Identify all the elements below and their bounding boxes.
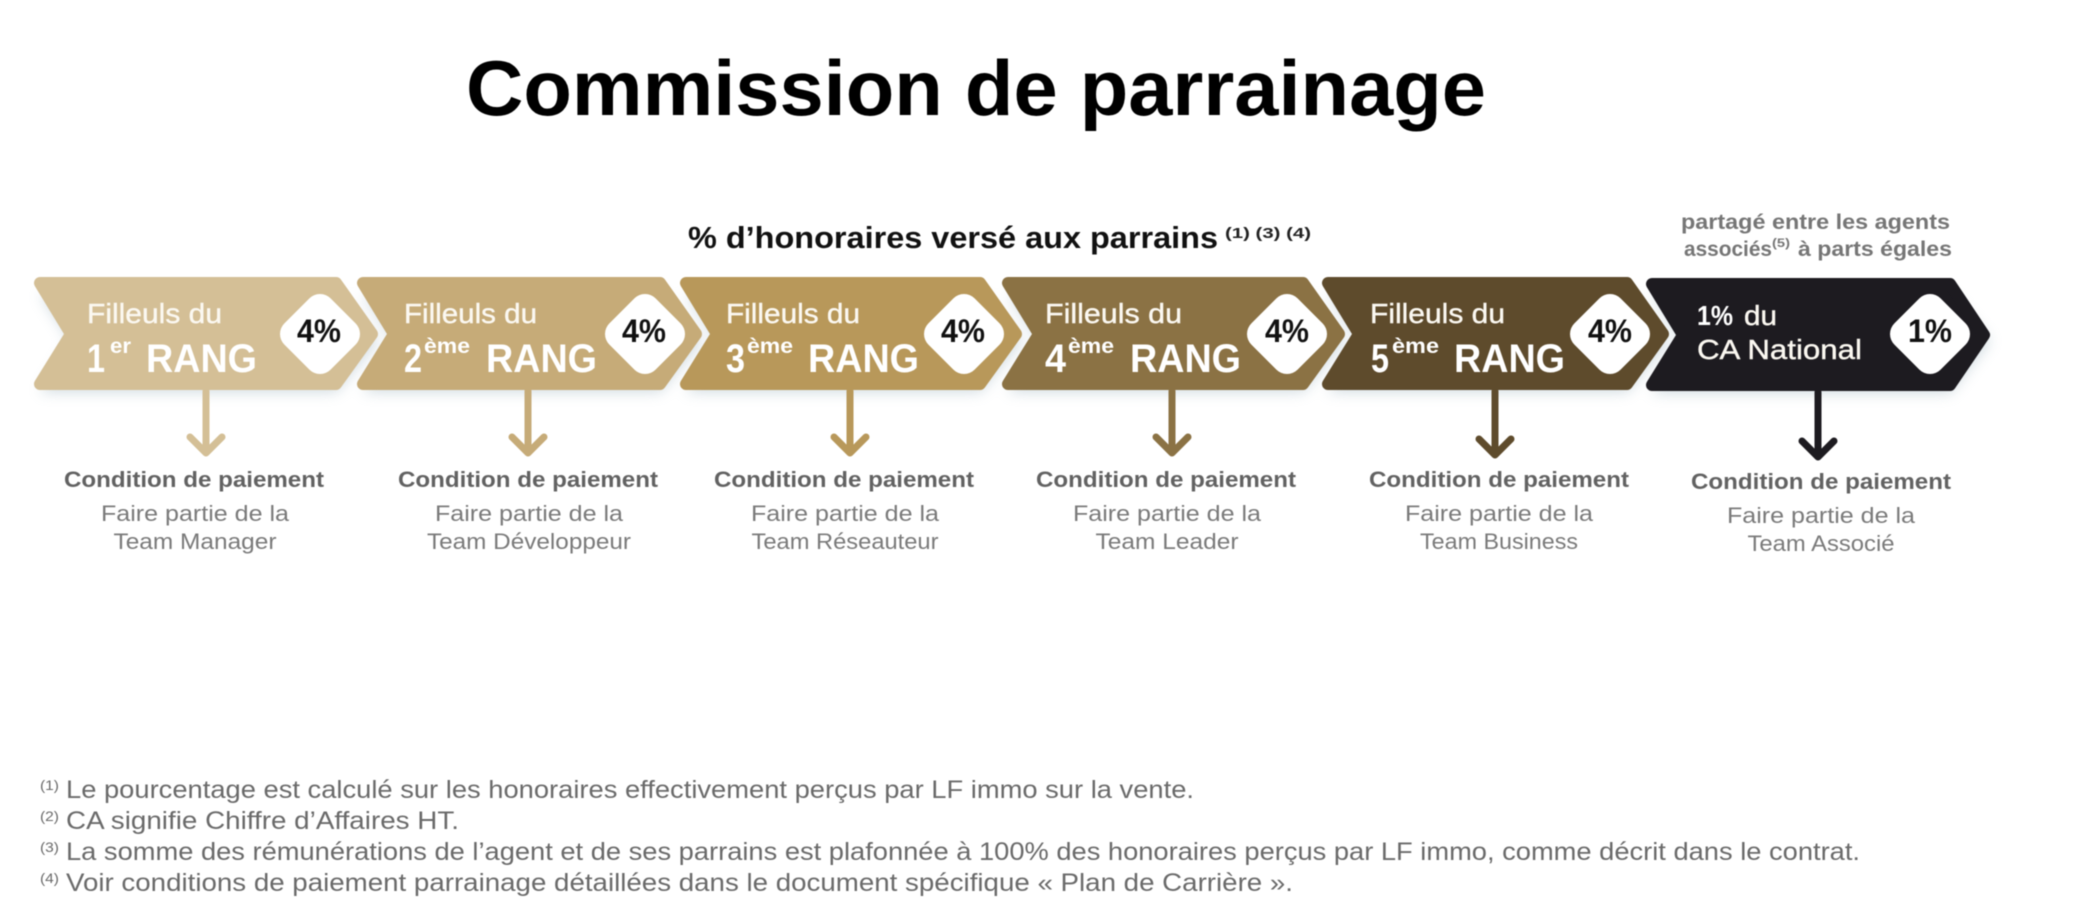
- badge: 4%: [1585, 309, 1635, 359]
- label: filleuls du 1er rang: er: [110, 335, 131, 358]
- label: filleuls du 3ème rang: RANG: [808, 337, 919, 381]
- payment condition: Team Manager: [114, 529, 276, 554]
- label: filleuls du 1er rang: Filleuls du: [87, 298, 222, 329]
- payment condition: Condition de paiement: [1691, 469, 1952, 494]
- note: shared between associate agents: [1681, 211, 1952, 261]
- panel: rank 1: [40, 283, 372, 554]
- label: filleuls du 3ème rang: ème: [747, 335, 793, 358]
- label: filleuls du 3ème rang: Filleuls du: [726, 298, 860, 329]
- label: 1% du CA National: 1%: [1697, 300, 1733, 331]
- arrow: [190, 391, 222, 453]
- footnotes: [40, 776, 1860, 897]
- note: shared between associate agents: à parts égales: [1798, 238, 1952, 261]
- payment condition: [1691, 469, 1952, 556]
- payment condition: Team Associé: [1748, 531, 1894, 556]
- label: 1% du CA National: CA National: [1697, 334, 1862, 365]
- label: 1% du CA National: du: [1744, 300, 1777, 331]
- badge: 4%: 4%: [1265, 313, 1309, 349]
- label: filleuls du 1er rang: RANG: [146, 337, 257, 381]
- payment condition: Team Réseauteur: [752, 529, 938, 554]
- label: filleuls du 5ème rang: [1370, 298, 1565, 381]
- payment condition: Faire partie de la: [751, 501, 940, 526]
- payment condition: Condition de paiement: [1036, 467, 1297, 492]
- badge: 4%: 4%: [941, 313, 985, 349]
- badge: 4%: 4%: [1588, 313, 1632, 349]
- subtitle: percentage paid to sponsors: (1) (3) (4): [1225, 225, 1311, 242]
- badge: 4%: 4%: [297, 313, 341, 349]
- footnote 1: Le pourcentage est calculé sur les honoraires effectivement perçus par LF immo sur la vente.: [66, 776, 1194, 804]
- chevron 4: [1008, 283, 1339, 384]
- chevron 1: [40, 283, 372, 384]
- payment condition: [714, 467, 975, 554]
- payment condition: Faire partie de la: [435, 501, 624, 526]
- label: filleuls du 5ème rang: ème: [1392, 335, 1439, 358]
- badge: 1%: [1905, 309, 1955, 359]
- panel: rank 4: [1008, 283, 1339, 554]
- footnote 2: CA signifie Chiffre d’Affaires HT.: [66, 807, 459, 835]
- payment condition: [1369, 467, 1630, 554]
- label: filleuls du 4ème rang: 4: [1045, 337, 1067, 381]
- payment condition: Faire partie de la: [101, 501, 290, 526]
- label: filleuls du 2ème rang: ème: [424, 335, 470, 358]
- panel: rank 5: [1328, 283, 1663, 554]
- badge: 4%: [620, 309, 670, 359]
- label: filleuls du 2ème rang: Filleuls du: [404, 298, 537, 329]
- payment condition: [64, 467, 325, 554]
- note: shared between associate agents: (5): [1772, 236, 1790, 250]
- panel: rank 2: [363, 283, 696, 554]
- payment condition: Condition de paiement: [398, 467, 659, 492]
- label: filleuls du 1er rang: [87, 298, 257, 381]
- arrow: [1156, 391, 1188, 453]
- arrow: [512, 391, 544, 453]
- payment condition: Faire partie de la: [1073, 501, 1262, 526]
- arrow: [1479, 391, 1511, 455]
- panel: rank 3: [686, 283, 1016, 554]
- label: filleuls du 2ème rang: 2: [404, 337, 422, 381]
- badge: 4%: [295, 309, 345, 359]
- badge: 4%: [1262, 309, 1312, 359]
- payment condition: [398, 467, 659, 554]
- label: filleuls du 2ème rang: [404, 298, 597, 381]
- footnote 3: (3): [40, 839, 59, 855]
- label: filleuls du 4ème rang: ème: [1068, 335, 1114, 358]
- label: filleuls du 5ème rang: Filleuls du: [1370, 298, 1505, 329]
- label: filleuls du 3ème rang: 3: [726, 337, 745, 381]
- chevron 6: [1652, 284, 1984, 385]
- payment condition: Condition de paiement: [714, 467, 975, 492]
- label: filleuls du 2ème rang: RANG: [486, 337, 597, 381]
- arrow: [834, 391, 866, 453]
- label: filleuls du 4ème rang: Filleuls du: [1045, 298, 1182, 329]
- payment condition: Team Leader: [1096, 529, 1238, 554]
- payment condition: Condition de paiement: [1369, 467, 1630, 492]
- chevron 3: [686, 283, 1016, 384]
- payment condition: [1036, 467, 1297, 554]
- label: filleuls du 3ème rang: [726, 298, 919, 381]
- footnote 2: (2): [40, 808, 59, 824]
- chevron 5: [1328, 283, 1663, 384]
- subtitle: percentage paid to sponsors: % d’honoraires versé aux parrains: [688, 220, 1218, 255]
- footnote 3: La somme des rémunérations de l’agent et de ses parrains est plafonnée à 100% des honoraires perçus par LF immo, comme décrit dans le contrat.: [66, 838, 1860, 866]
- payment condition: Condition de paiement: [64, 467, 325, 492]
- note: shared between associate agents: partagé entre les agents: [1681, 211, 1950, 234]
- payment condition: Faire partie de la: [1727, 503, 1916, 528]
- note: shared between associate agents: associés: [1684, 238, 1772, 261]
- label: filleuls du 1er rang: 1: [87, 337, 105, 381]
- badge: 4%: [939, 309, 989, 359]
- footnote 1: (1): [40, 777, 59, 793]
- title: Commission de parrainage: [466, 44, 1486, 132]
- panel: national turnover: [1652, 284, 1984, 556]
- footnote 4: (4): [40, 870, 59, 886]
- badge: 4%: 4%: [622, 313, 666, 349]
- label: filleuls du 5ème rang: 5: [1371, 337, 1389, 381]
- chevron 2: [363, 283, 696, 384]
- payment condition: Team Développeur: [427, 529, 631, 554]
- label: filleuls du 5ème rang: RANG: [1454, 337, 1565, 381]
- label: filleuls du 4ème rang: [1045, 298, 1241, 381]
- label: 1% du CA National: [1697, 300, 1862, 365]
- footnote 4: Voir conditions de paiement parrainage détaillées dans le document spécifique « Plan de Carrière ».: [66, 869, 1293, 897]
- payment condition: Faire partie de la: [1405, 501, 1594, 526]
- payment condition: Team Business: [1420, 529, 1578, 554]
- badge: 1%: 1%: [1908, 313, 1952, 349]
- chevron shadows: [40, 294, 1990, 393]
- label: filleuls du 4ème rang: RANG: [1130, 337, 1241, 381]
- arrow: [1802, 392, 1834, 457]
